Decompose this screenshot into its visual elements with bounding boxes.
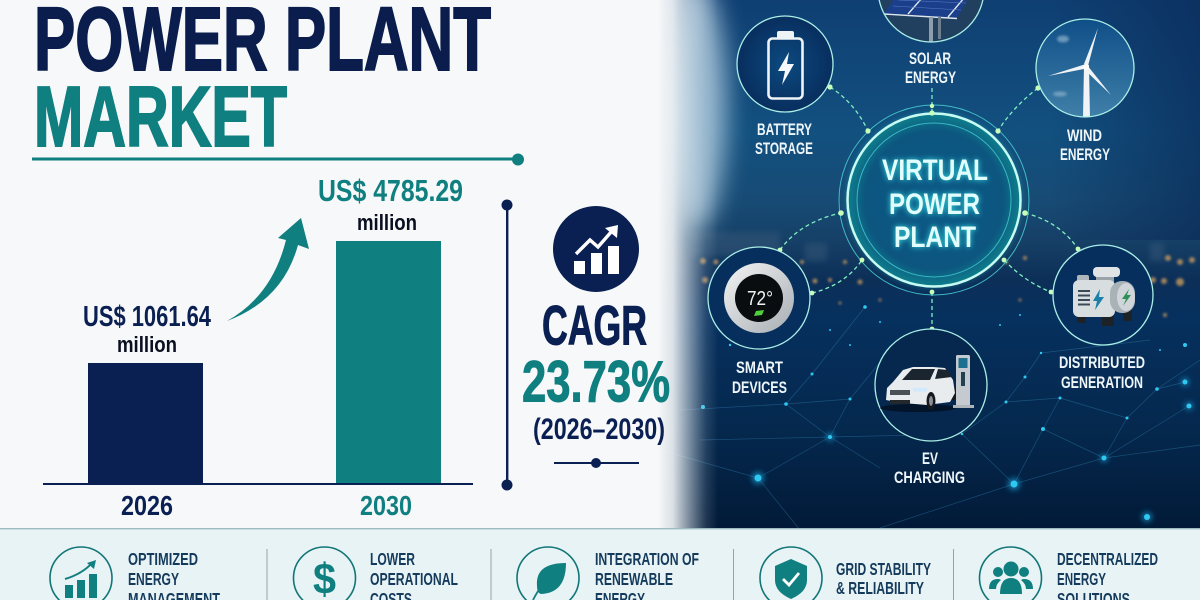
- benefit: grid stability and reliability: GRID STABILITY: [836, 559, 931, 579]
- benefit: lower operational costs: LOWER: [370, 549, 415, 569]
- node: solar energy: SOLAR: [909, 50, 951, 68]
- node: wind energy: WIND: [1067, 127, 1102, 145]
- node: EV charging: EV: [922, 450, 938, 468]
- year labels: [121, 490, 412, 521]
- year labels: 2030: [360, 490, 412, 521]
- CAGR block: 23.73%: [522, 350, 670, 414]
- node: virtual power plant hub: POWER: [889, 188, 980, 221]
- bar chart: [43, 173, 473, 521]
- node: smart devices: 72°: [747, 288, 773, 310]
- title: [34, 0, 491, 165]
- node: wind energy: ENERGY: [1060, 146, 1110, 164]
- benefit: grid stability and reliability: & RELIABILITY: [836, 578, 924, 598]
- benefit: decentralized energy solutions: [980, 547, 1158, 600]
- node: virtual power plant hub: [839, 105, 1029, 295]
- label 2026 value: US$ 1061.64: [83, 301, 211, 333]
- small divider: [554, 458, 639, 468]
- benefit: optimized energy management: ENERGY: [128, 569, 179, 589]
- year labels: 2026: [121, 490, 173, 521]
- benefit: lower operational costs: [294, 547, 458, 600]
- CAGR block: [522, 206, 670, 468]
- node: solar energy: ENERGY: [905, 69, 956, 87]
- CAGR block: (2026–2030): [533, 413, 665, 446]
- node: smart devices: SMART: [736, 359, 783, 377]
- node: battery storage: [737, 16, 833, 158]
- benefit: optimized energy management: [50, 547, 220, 600]
- growth arrow: [227, 218, 309, 321]
- connector dots: [778, 84, 1080, 331]
- panel: virtual power plant network: [640, 0, 1200, 530]
- bar: 2030: [336, 241, 441, 484]
- title rule: [32, 154, 524, 166]
- network mesh: [660, 307, 1200, 530]
- benefit: optimized energy management: OPTIMIZED: [128, 549, 198, 569]
- node: virtual power plant hub: VIRTUAL: [882, 154, 988, 187]
- axis: [43, 483, 473, 485]
- node: distributed generation: GENERATION: [1061, 374, 1143, 392]
- CAGR block: CAGR: [542, 294, 647, 356]
- connectors: [780, 87, 1078, 329]
- benefit: integration of renewable energy: INTEGRATION OF: [595, 549, 699, 569]
- label 2026 value: million: [117, 332, 177, 357]
- node: battery storage: STORAGE: [755, 140, 813, 158]
- vertical divider: [502, 200, 512, 490]
- node: wind energy: [1036, 19, 1134, 164]
- node: solar energy: [878, 0, 984, 87]
- benefit: lower operational costs: OPERATIONAL: [370, 569, 458, 589]
- node: EV charging: [875, 329, 987, 487]
- label 2030 value: US$ 4785.29: [318, 173, 463, 208]
- title: MARKET: [34, 70, 287, 165]
- benefit: decentralized energy solutions: ENERGY: [1057, 569, 1106, 589]
- bar: 2026: [88, 363, 203, 484]
- node: EV charging: CHARGING: [894, 469, 965, 487]
- benefit: integration of renewable energy: RENEWABLE: [595, 569, 673, 589]
- label 2030 value: [318, 173, 463, 235]
- node: distributed generation: DISTRIBUTED: [1059, 354, 1145, 372]
- node: battery storage: BATTERY: [757, 121, 812, 139]
- pale haze at upper edge: [667, 0, 727, 230]
- node: distributed generation: [1053, 245, 1153, 392]
- node: smart devices: [708, 247, 810, 397]
- label 2030 value: million: [357, 210, 417, 235]
- benefit: grid stability and reliability: [760, 547, 931, 600]
- white fade into left column: [640, 0, 718, 528]
- skyline and city lights: [690, 232, 1195, 317]
- node: smart devices: DEVICES: [732, 379, 787, 397]
- panel: benefits strip: [0, 528, 1200, 600]
- label 2026 value: [83, 301, 211, 357]
- node: virtual power plant hub: PLANT: [894, 221, 976, 254]
- benefit: integration of renewable energy: [517, 547, 699, 600]
- icon: growth chart: [553, 206, 639, 292]
